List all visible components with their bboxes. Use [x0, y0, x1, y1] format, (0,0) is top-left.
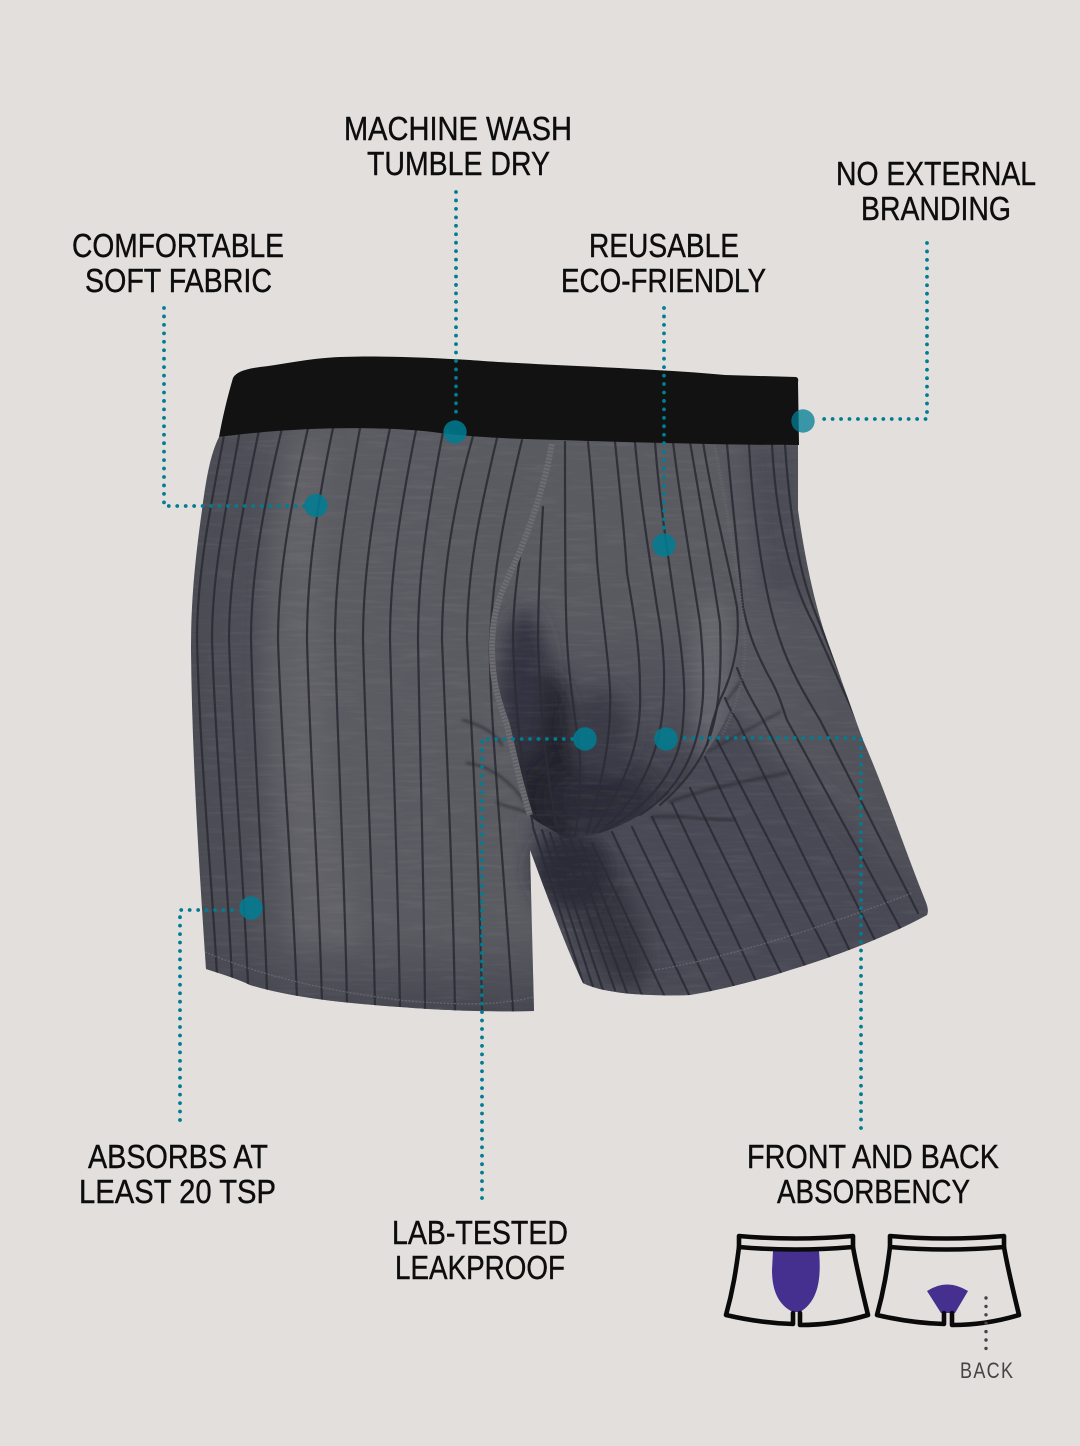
- right leg shading: [530, 700, 930, 1000]
- callout: front and back absorbency: FRONT AND BACK: [747, 1138, 999, 1175]
- callout: no external branding: BRANDING: [861, 190, 1011, 227]
- left leg highlight: [262, 440, 360, 950]
- callout: no external branding: NO EXTERNAL: [836, 155, 1036, 192]
- callout: no external branding: [791, 155, 1036, 433]
- side pouch seam: [715, 445, 745, 735]
- callout: comfortable soft fabric: COMFORTABLE: [72, 227, 284, 264]
- back label with pointer: BACK: [960, 1359, 1014, 1383]
- back label with pointer: [960, 1298, 1014, 1383]
- fly seam stitching: [492, 443, 552, 815]
- hem stitching: [205, 893, 912, 1004]
- callout: reusable eco-friendly: [561, 227, 766, 557]
- callout: absorbs at least 20 tsp: LEAST 20 TSP: [79, 1173, 276, 1210]
- pouch shading: [495, 602, 730, 838]
- icon: back absorbency diagram: [877, 1236, 1019, 1325]
- wrinkles and folds: [463, 680, 787, 820]
- callout: absorbs at least 20 tsp: [79, 896, 276, 1210]
- fabric heather texture: [207, 487, 771, 998]
- hem shading: [205, 956, 534, 1012]
- illustration: striped boxer briefs: [180, 357, 940, 1020]
- callout: lab-tested leakproof: [392, 727, 597, 1286]
- callout: lab-tested leakproof: LEAKPROOF: [395, 1249, 565, 1286]
- callout: comfortable soft fabric: [72, 227, 328, 517]
- callout: front and back absorbency: [654, 727, 999, 1210]
- callout: lab-tested leakproof: LAB-TESTED: [392, 1214, 568, 1251]
- callout: machine wash, tumble dry: TUMBLE DRY: [367, 145, 550, 182]
- callout: machine wash, tumble dry: [344, 110, 572, 444]
- hip and right leg pinstripes: [533, 444, 925, 997]
- callout: machine wash, tumble dry: MACHINE WASH: [344, 110, 572, 147]
- black waistband: [219, 357, 799, 445]
- vertical pinstripes left leg: [197, 428, 522, 1011]
- pouch pinstripes: [513, 442, 738, 835]
- fly seam: [492, 443, 552, 815]
- callout: front and back absorbency: ABSORBENCY: [777, 1173, 970, 1210]
- icon: front absorbency diagram: [726, 1236, 868, 1325]
- callout: comfortable soft fabric: SOFT FABRIC: [85, 262, 272, 299]
- callout: absorbs at least 20 tsp: ABSORBS AT: [88, 1138, 268, 1175]
- callout: reusable eco-friendly: ECO-FRIENDLY: [561, 262, 766, 299]
- shorts fabric body: [180, 420, 940, 1020]
- hip shading: [752, 449, 815, 599]
- callout: reusable eco-friendly: REUSABLE: [589, 227, 739, 264]
